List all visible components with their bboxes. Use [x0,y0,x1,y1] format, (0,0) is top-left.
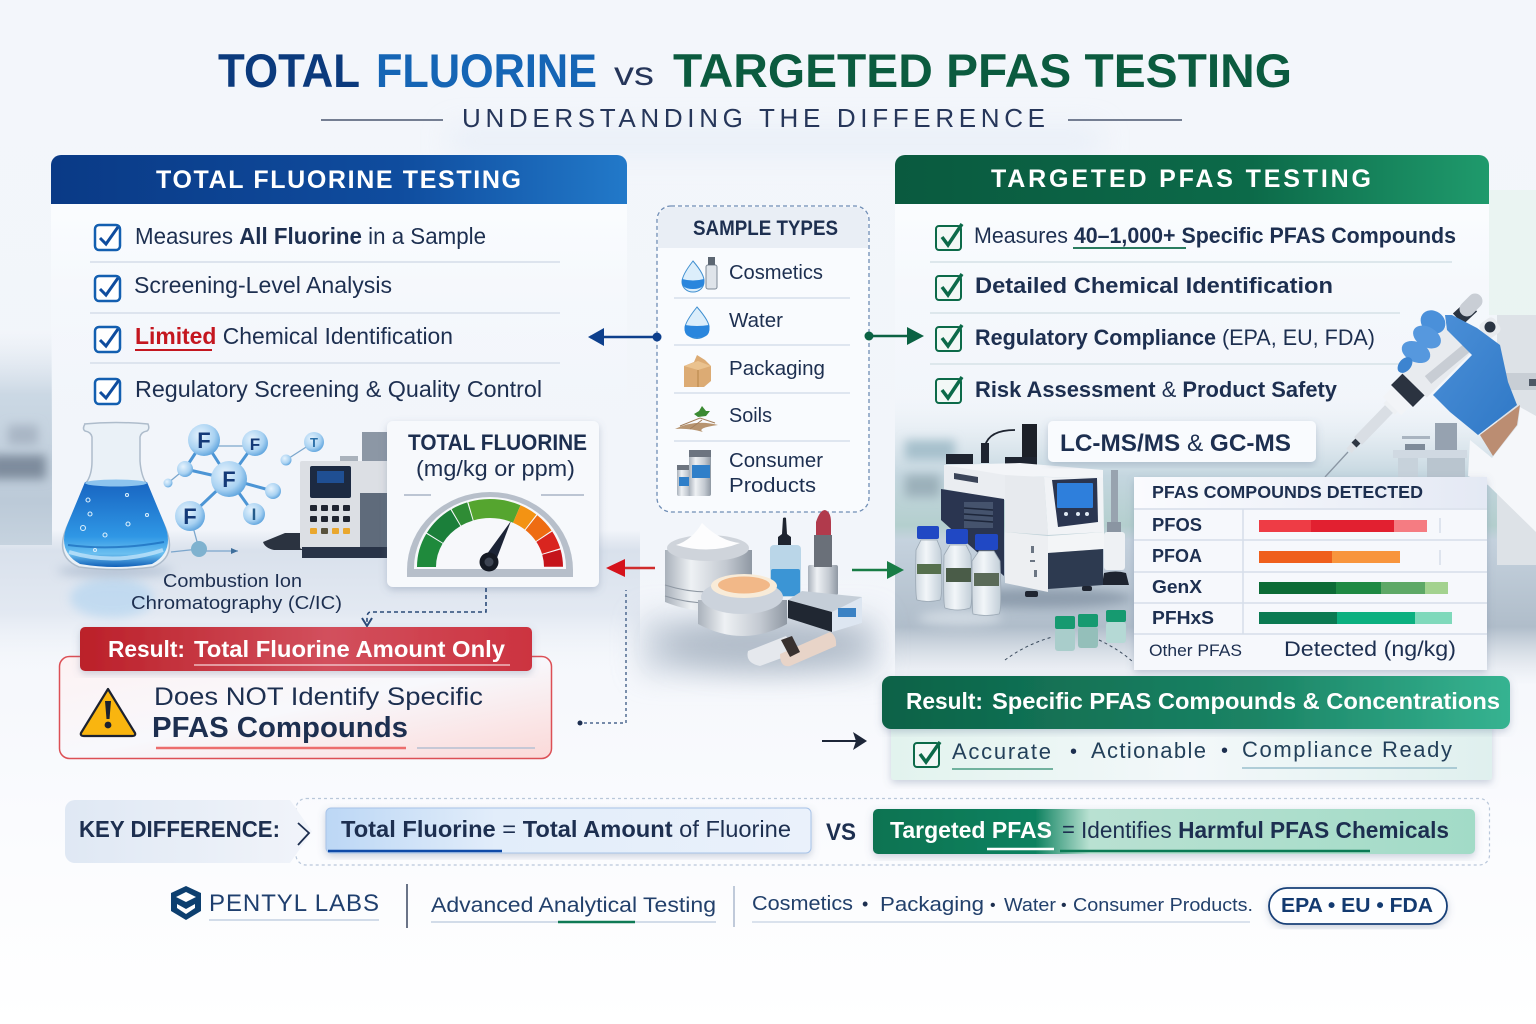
row: genx [1152,576,1448,597]
result box: accurate, actionable, compliance ready [891,722,1492,780]
footer: application list: Water [1004,895,1056,915]
instrument caption: Combustion Ion [163,571,302,591]
checklist item: measures compounds: Measures 40–1,000+ Specific PFAS Compounds [974,223,1456,248]
panel: targeted pfas testing [895,155,1489,444]
title: vs [614,55,654,92]
logo: pentyl labs: PENTYL LABS [209,890,379,917]
table: pfas compounds detected [1134,477,1487,670]
sample types heading: SAMPLE TYPES [693,217,838,240]
sample types heading [658,207,868,248]
row: pfoa: PFOA [1152,545,1202,566]
title [218,44,1292,97]
small box [788,591,862,632]
icon: fluorine molecule network: F [197,428,211,453]
label: lc-ms/ms and gc-ms: LC-MS/MS & GC-MS [1060,430,1291,457]
sample: soils [675,405,772,432]
row: pfos: PFOS [1152,514,1202,535]
row: other pfas: Detected (ng/kg) [1284,638,1456,661]
result box: accurate, actionable, compliance ready: Accurate [952,739,1051,764]
chart: gauge dial [407,492,573,577]
result banner: specific pfas compounds: Specific PFAS Compounds & Concentrations [992,688,1500,714]
footer: application list: Packaging [880,894,984,916]
icon: warning triangle [81,689,135,736]
pill: targeted pfas definition: Identifies Harmful PFAS Chemicals [1081,817,1449,843]
panel: sample types [657,206,869,512]
cream jar [665,523,752,611]
key difference label [65,800,312,863]
icon: combustion ion chromatography instrument [263,432,390,558]
connector: gauge to result [362,588,486,626]
warning box: PFAS Compounds [152,712,408,744]
panel header: total fluorine: TOTAL FLUORINE TESTING [156,166,521,194]
icon: fluorine molecule network: F [222,467,236,492]
row: pfoa [1152,545,1400,566]
row: genx: GenX [1152,576,1203,597]
gauge card: total fluorine: TOTAL FLUORINE [408,430,587,455]
icon: fluorine molecule network: T [310,435,318,450]
sample: consumer products: Consumer [729,450,823,472]
row: pfhxs [1152,607,1452,628]
icon: green capped vials [1005,610,1133,662]
checklist item: regulatory screening: Regulatory Screening & Quality Control [135,376,542,402]
vs label: VS [826,819,856,846]
gloved hand [1395,306,1517,435]
icon: fluorine molecule network: F [183,504,197,529]
tagline: advanced analytical testing: Advanced Analytical Testing [431,894,716,917]
gauge card: total fluorine [387,421,599,587]
footer: application list [752,893,1253,922]
lab background equipment [1393,315,1536,565]
result box: accurate, actionable, compliance ready: • [1070,741,1077,763]
checklist item: limited identification: Limited Chemical Identification [135,323,453,349]
result box: accurate, actionable, compliance ready: • [1221,740,1228,762]
footer: application list: Consumer Products. [1073,895,1253,915]
row: other pfas: Other PFAS [1149,641,1242,660]
footer: application list: • [862,894,868,914]
icon: fluorine molecule network: F [250,435,260,454]
result banner: specific pfas compounds: Result: [906,688,983,714]
checklist item: screening-level: Screening-Level Analysis [134,272,392,298]
sample: packaging: Packaging [729,358,825,380]
sample: packaging [684,355,825,387]
warning box [60,656,552,758]
title: TOTAL [218,44,360,97]
icon: fluorine molecule network [164,424,324,557]
result banner: total fluorine amount only [80,627,532,671]
key difference label: KEY DIFFERENCE: [79,816,280,842]
footer: application list: • [990,897,996,914]
sample: consumer products [677,450,823,497]
arrow: red to gauge [606,559,655,577]
checklist item: detailed identification: Detailed Chemical Identification [975,273,1333,298]
background with hazy laboratory [0,0,1536,722]
footer: application list: Cosmetics [752,893,853,915]
icon: green check [914,742,940,767]
title: FLUORINE [376,44,597,97]
panel header: total fluorine [51,155,627,204]
warning box: Does NOT Identify Specific [154,683,483,711]
compact [698,574,787,636]
sample: cosmetics [682,257,823,292]
checklist item: regulatory compliance: Regulatory Compliance (EPA, EU, FDA) [975,325,1375,350]
arrow: sample types to targeted pfas [864,327,924,345]
subtitle: UNDERSTANDING THE DIFFERENCE [462,103,1045,133]
badge: epa eu fda [1269,888,1447,924]
panel header: targeted pfas: TARGETED PFAS TESTING [991,165,1371,193]
footer: application list: • [1061,897,1067,914]
pill: targeted pfas definition: = [1062,817,1075,842]
lab coat [1468,405,1536,532]
instrument caption [131,571,342,613]
icon: hexagon shield [171,886,201,920]
tubes [748,632,836,666]
key difference dashed frame [296,798,1490,865]
sample: water: Water [729,310,783,332]
result box: accurate, actionable, compliance ready: Compliance Ready [1242,737,1452,762]
gauge needle [480,521,511,572]
illustration: hand with pipette [1325,301,1536,532]
sample: consumer products: Products [729,475,816,497]
row: other pfas [1149,638,1456,661]
logo: pentyl labs [171,886,379,920]
sample: cosmetics: Cosmetics [729,262,823,284]
icon: blue capped vials [916,526,1002,626]
lipstick [808,510,838,595]
pill: targeted pfas definition [873,809,1475,854]
sample: soils: Soils [729,405,772,427]
icon: lc-ms instrument [941,424,1132,608]
checklist item: measures all fluorine: Measures All Fluorine in a Sample [135,223,486,249]
result box: accurate, actionable, compliance ready: Actionable [1091,738,1206,763]
panel: total fluorine testing [51,155,627,444]
pill: total fluorine definition [326,808,811,853]
column and foot [1102,470,1129,585]
sample: water [684,307,783,339]
result banner: total fluorine amount only: Total Fluorine Amount Only [194,636,505,662]
table: pfas compounds detected: PFAS COMPOUNDS DETECTED [1152,482,1423,502]
result banner: total fluorine amount only: Result: [108,636,185,662]
panel header: targeted pfas [895,155,1489,204]
arrow: sample types to total fluorine [588,328,662,346]
serum bottle [770,518,801,597]
result banner: specific pfas compounds [882,676,1510,729]
icon: fluorine molecule network: I [252,505,256,524]
icon: erlenmeyer flask [57,422,173,618]
row: pfhxs: PFHxS [1152,607,1214,628]
arrow: dark to result [822,732,867,750]
label: lc-ms/ms and gc-ms [1048,421,1316,462]
badge: epa eu fda: EPA • EU • FDA [1281,895,1433,917]
arrow: green to targeted instrument [852,561,904,579]
title: TARGETED PFAS TESTING [673,44,1292,97]
row: pfos [1152,514,1427,535]
illustration: cosmetics products [660,510,870,669]
connector: warning to cosmetics [578,590,626,726]
pill: total fluorine definition: Total Fluorine = Total Amount of Fluorine [341,816,791,842]
gauge card: total fluorine: (mg/kg or ppm) [416,456,575,481]
instrument caption: Chromatography (C/IC) [131,593,342,613]
checklist item: risk assessment: Risk Assessment & Product Safety [975,377,1338,402]
pill: targeted pfas definition: Targeted PFAS [890,817,1052,843]
